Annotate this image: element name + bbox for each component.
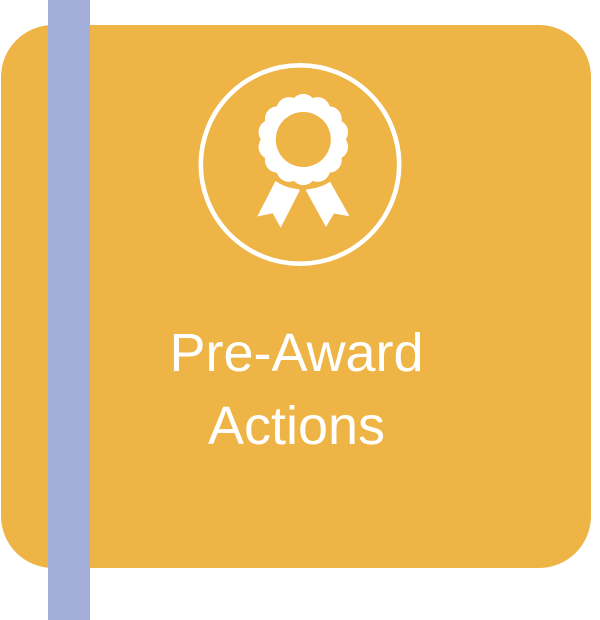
vertical lavender band bbox=[48, 0, 90, 620]
title: Pre-Award Actions bbox=[169, 323, 424, 456]
icon: award rosette in circle bbox=[201, 65, 399, 264]
title: Pre-Award Actions: Pre-Award bbox=[169, 323, 424, 383]
icon ring bbox=[201, 65, 399, 264]
rosette bbox=[253, 90, 353, 190]
ribbon tails bbox=[257, 180, 350, 228]
title: Pre-Award Actions: Actions bbox=[208, 396, 385, 456]
